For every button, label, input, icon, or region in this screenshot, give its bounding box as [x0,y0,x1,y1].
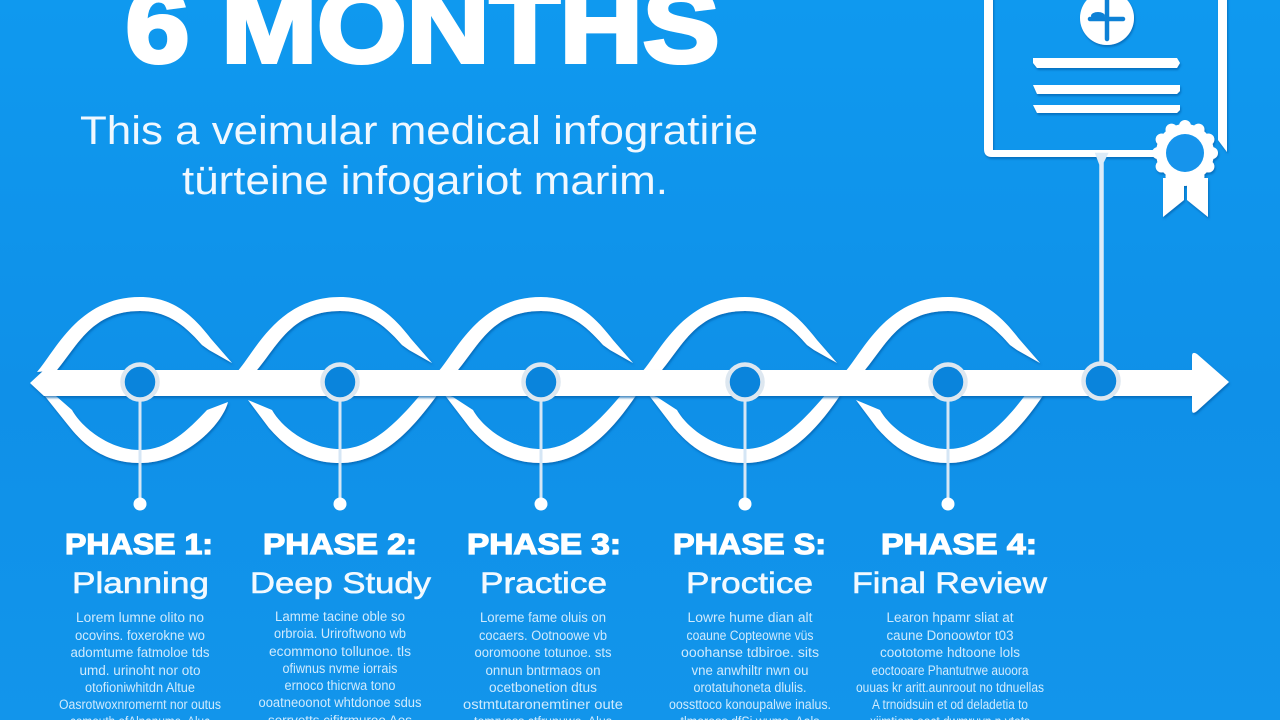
subheading: Deep Study [250,567,431,600]
heading: PHASE 2: [263,529,417,561]
timeline nodes [122,364,1118,400]
node 2 [322,364,358,400]
body text [463,610,623,720]
icon: medical certificate [984,0,1227,217]
node 3 [524,364,558,400]
upper arc 4 [642,297,837,372]
panel: phase 1 [59,529,221,720]
connector: certificate to final node [1098,155,1105,365]
node 4 [728,364,762,400]
stem 4 [738,400,752,510]
body text [669,610,831,720]
body text: ecommono tollunoe. tls [269,644,411,659]
panel: phase 2 [250,529,431,720]
lower arc 3 [444,394,637,463]
body text: Lorem lumne olito no [76,610,204,625]
subheading: Practice [480,567,607,600]
heading: PHASE 3: [467,529,621,561]
body text: ouuas kr aritt.aunroout no tdnuellas [856,680,1044,695]
certificate text lines [1033,58,1180,113]
body text: otofioniwhitdn Altue [85,680,195,695]
panel: phase 3 [463,529,623,720]
body text: onnun bntrmaos on [486,663,600,678]
lower arc 2 [248,394,438,463]
upper arc 2 [237,297,432,372]
body text [59,610,221,720]
stem 2 [334,400,346,510]
stem 1 [134,400,146,510]
body text: umd. urinoht nor oto [80,663,200,678]
body text: oossttoco konoupalwe inalus. [669,697,831,712]
body text: ofiwnus nvme iorrais [282,661,398,676]
award ribbon [1163,178,1208,217]
body text: Learon hpamr sliat at [886,610,1014,625]
award rosette [1152,120,1218,186]
body text: orbroia. Uriroftwono wb [274,626,406,641]
body text: ostmtutaronemtiner oute [463,697,623,712]
subtitle: türteine infogariot marim. [182,159,668,203]
body text: ocetbonetion dtus [489,680,597,695]
node 1 [122,364,158,400]
lower arc 4 [648,394,841,463]
body text [258,609,422,720]
heading: PHASE 4: [881,529,1037,561]
body text: vne anwhiltr nwn ou [692,663,808,678]
subheading: Final Review [852,567,1047,600]
stem 5 [942,400,954,510]
body text: Lamme tacine oble so [275,609,405,624]
stems and end dots [134,400,954,510]
body text: coototome hdtoone lols [880,645,1020,660]
subtitle: This a veimular medical infogratirie [80,109,758,153]
lower arc 5 [856,394,1044,463]
subtitle [80,109,758,203]
arrow: timeline axis [30,353,1229,413]
upper arc 1 [37,297,232,372]
body text: Oasrotwoxnromernt nor outus [59,697,221,712]
body text: A trnoidsuin et od deladetia to [872,697,1028,712]
body text: Loreme fame oluis on [480,610,606,625]
heading: PHASE 1: [65,529,213,561]
final node [1084,364,1118,398]
body text: eoctooare Phantutrwe auoora [872,663,1029,678]
body text [856,610,1044,720]
heading: PHASE S: [673,529,826,561]
timeline wave arcs [37,297,1044,463]
body text: coaune Copteowne vüs [686,628,814,643]
body text: cocaers. Ootnoowe vb [479,628,607,643]
panel: phase 4 [669,529,831,720]
upper arc 5 [845,297,1040,372]
body text: ernoco thicrwa tono [284,678,396,693]
body text: ooatneoonot whtdonoe sdus [258,695,422,710]
body text: orotatuhoneta dlulis. [694,680,806,695]
body text: ooohanse tdbiroe. sits [681,645,819,660]
stem 3 [534,400,548,510]
panel: phase 5 [852,529,1047,720]
body text: ocovins. foxerokne wo [75,628,205,643]
upper arc 3 [438,297,633,372]
body text: adomtume fatmoloe tds [70,645,210,660]
medical emblem [1080,0,1134,45]
body text: Lowre hume dian alt [688,610,813,625]
subheading: Planning [72,567,209,600]
certificate frame [984,0,1227,157]
lower arc 1 [40,390,228,463]
node 5 [930,364,966,400]
body text: ooromoone totunoe. sts [474,645,612,660]
body text: caune Donoowtor t03 [886,628,1014,643]
subheading: Proctice [686,567,813,600]
